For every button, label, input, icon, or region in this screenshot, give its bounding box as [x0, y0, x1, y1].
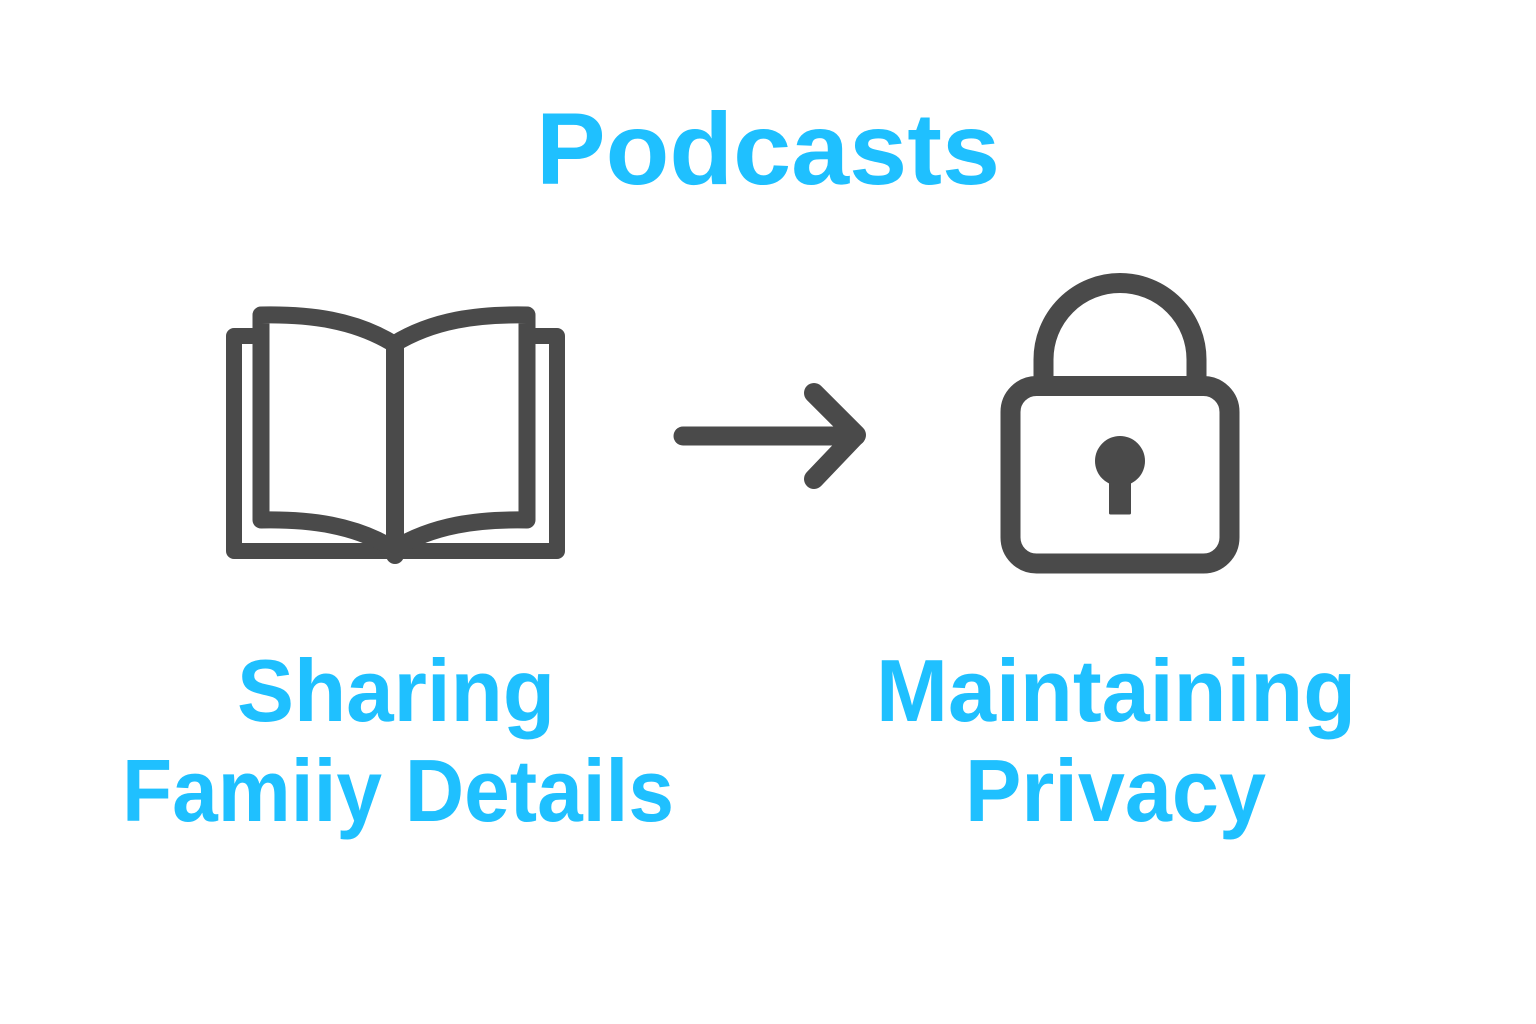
label: maintaining privacy [876, 641, 1356, 840]
icon: arrow [683, 393, 856, 479]
label: maintaining privacy: Maintaining [876, 641, 1356, 740]
label: sharing family details: Sharing [237, 641, 555, 740]
icon: open book [234, 315, 557, 555]
title: Podcasts [536, 92, 1000, 206]
label: sharing family details [122, 641, 674, 840]
label: sharing family details: Famiiy Details [122, 741, 674, 840]
icon: padlock [1010, 283, 1230, 564]
label: maintaining privacy: Privacy [965, 741, 1266, 840]
